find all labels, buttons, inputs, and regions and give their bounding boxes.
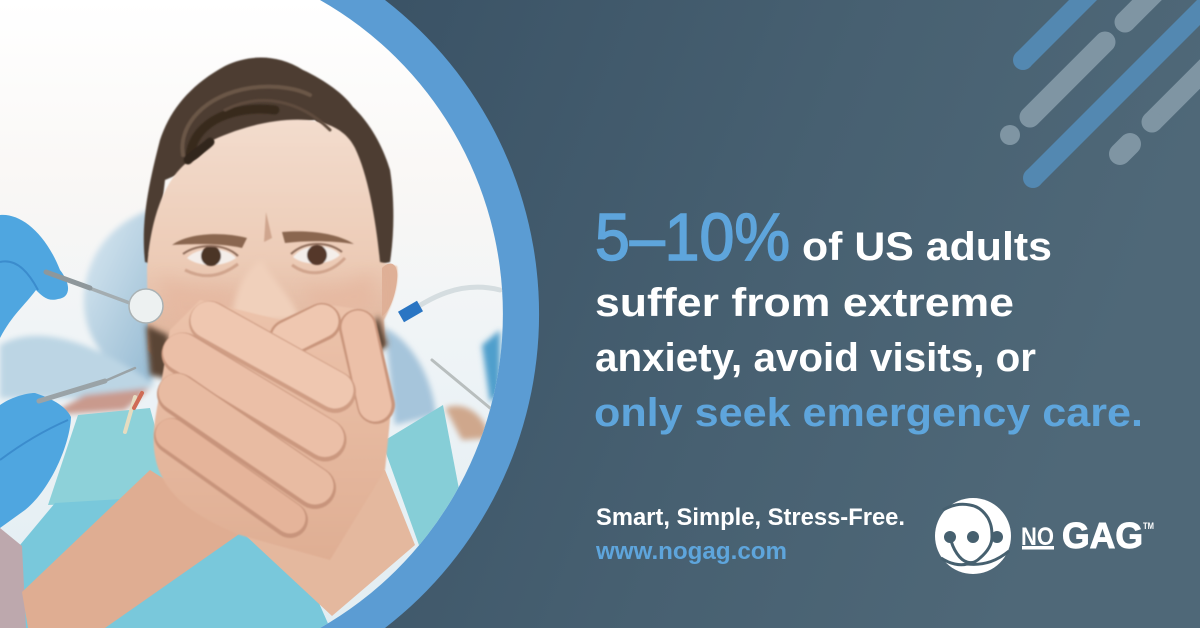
nose (233, 270, 297, 320)
logo mark (935, 498, 1011, 574)
forearms (22, 470, 415, 628)
face shading (175, 284, 366, 294)
logo: No Gag: GAG (1062, 515, 1143, 556)
website url: www.nogag.com (595, 538, 787, 565)
decorative diagonal stripes (1000, 0, 1200, 188)
logo: No Gag (935, 498, 1154, 574)
gloved hands (0, 215, 71, 528)
face (147, 120, 398, 375)
headline (594, 200, 1143, 435)
photo: frightened patient at dentist (0, 0, 505, 628)
beard shadow (146, 315, 388, 380)
logo: No Gag: TM (1143, 521, 1154, 531)
clinic background (0, 0, 505, 628)
tagline: Smart, Simple, Stress-Free. (596, 504, 905, 531)
hair (144, 58, 393, 265)
line: of US adults: of US adults (802, 225, 1052, 269)
eyebrows and eyes (172, 212, 354, 276)
ear (382, 264, 397, 316)
hair curl (182, 87, 330, 160)
dental chair headrest (0, 210, 500, 440)
line: anxiety, avoid visits, or: anxiety, avoid visits, or (595, 336, 1036, 380)
line: suffer from extreme: suffer from extreme (595, 281, 1014, 325)
line: only seek emergency care.: only seek emergency care. (594, 391, 1143, 435)
hands over mouth (154, 300, 392, 560)
logo wordmark: NO (1021, 523, 1054, 551)
statistic 5–10%: 5–10% (595, 200, 790, 275)
patient's bib (0, 405, 462, 628)
blue ring around photo (0, 0, 539, 628)
dental mirror and tools (39, 272, 500, 432)
